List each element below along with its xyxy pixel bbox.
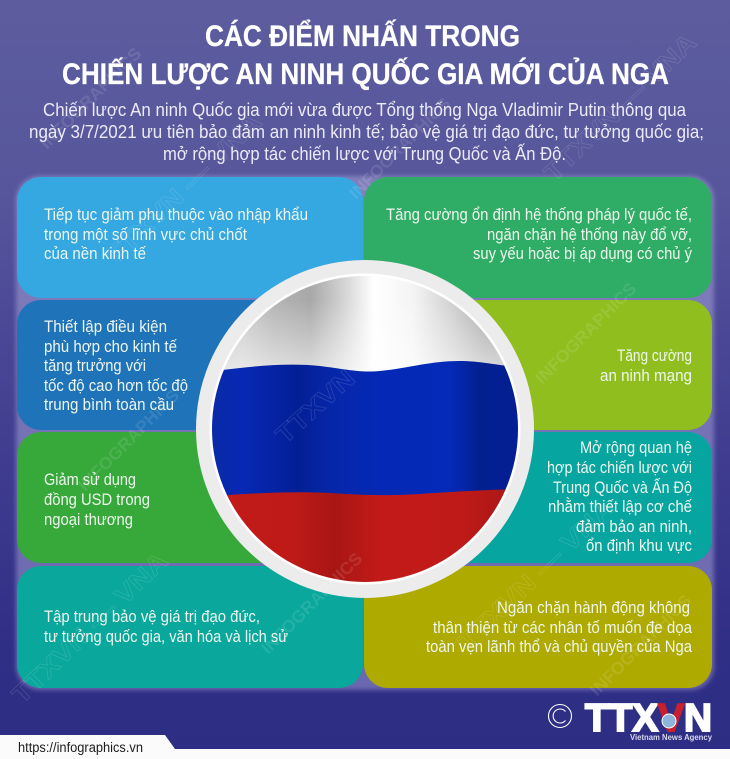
text: cyber security: Tăng cường	[617, 347, 692, 365]
text: strategic cooperation: nhằm thiết lập cơ chế	[548, 497, 692, 516]
title: CÁC ĐIỂM NHẤN TRONG	[205, 19, 520, 53]
text: international law: ngăn chặn hệ thống này đổ vỡ,	[487, 226, 692, 244]
text: import dependence: của nền kinh tế	[44, 245, 146, 263]
text: moral values: Tập trung bảo vệ giá trị đạo đức,	[44, 608, 260, 626]
text: economic growth: tăng trưởng với	[44, 357, 146, 375]
text: strategic cooperation: hợp tác chiến lược với	[547, 459, 692, 477]
text: economic growth: tốc độ cao hơn tốc độ	[44, 377, 188, 395]
watermarks: TTXVN — VNA	[270, 292, 441, 449]
panel: cyber security	[364, 300, 712, 430]
panel glow	[16, 176, 714, 690]
source URL: https://infographics.vn	[18, 740, 143, 755]
intro text: Chiến lược An ninh Quốc gia mới vừa được Tổng thống Nga Vladimir Putin thông qua	[43, 99, 687, 120]
watermarks: TTXVN — VNA	[101, 108, 268, 270]
text: territorial integrity: Ngăn chặn hành động không	[497, 599, 690, 617]
intro text: mở rộng hợp tác chiến lược với Trung Quốc và Ấn Độ.	[163, 143, 566, 164]
text: strategic cooperation: ổn định khu vực	[586, 537, 692, 555]
text: economic growth: trung bình toàn cầu	[44, 396, 174, 414]
text: import dependence: Tiếp tục giảm phụ thuộc vào nhập khẩu	[44, 206, 308, 224]
watermarks: INFOGRAPHICS	[531, 279, 640, 388]
watermarks: TTXVN — VNA	[539, 28, 702, 187]
watermarks: INFOGRAPHICS	[74, 386, 183, 495]
text: economic growth: Thiết lập điều kiện	[44, 318, 167, 336]
panel: international law	[364, 177, 712, 298]
text: international law: suy yếu hoặc bị áp dụng có chủ ý	[473, 245, 693, 263]
panel: reduce USD	[17, 432, 363, 563]
watermarks: INFOGRAPHICS	[586, 591, 695, 700]
text: territorial integrity: toàn vẹn lãnh thổ và chủ quyền của Nga	[426, 638, 693, 656]
icon: copyright	[548, 704, 572, 728]
text: import dependence: trong một số lĩnh vực chủ chốt	[44, 226, 247, 244]
panel: strategic cooperation	[364, 432, 712, 563]
watermarks: INFOGRAPHICS	[257, 549, 366, 658]
watermarks: TTXVN — VNA	[453, 494, 620, 656]
text: cyber security: an ninh mạng	[600, 367, 692, 385]
logo: TTXVN: Vietnam News Agency	[630, 732, 712, 742]
text: strategic cooperation: đảm bảo an ninh,	[576, 518, 692, 536]
text: moral values: tư tưởng quốc gia, văn hóa và lịch sử	[44, 628, 288, 646]
text: territorial integrity: thân thiện từ các nhân tố muốn đe dọa	[433, 619, 693, 637]
footer strip with URL	[0, 735, 730, 759]
icon: Russian flag medallion	[196, 260, 534, 598]
text: strategic cooperation: Trung Quốc và Ấn Độ	[553, 478, 692, 497]
text: reduce USD: ngoại thương	[44, 511, 133, 529]
watermarks: INFOGRAPHICS	[345, 94, 454, 203]
title	[62, 19, 669, 91]
text: reduce USD: Giảm sử dụng	[44, 471, 136, 489]
panel: economic growth	[17, 300, 363, 430]
text: reduce USD: đồng USD trong	[44, 491, 150, 509]
panel: moral values	[17, 566, 363, 688]
watermarks: INFOGRAPHICS	[36, 44, 145, 153]
text: international law: Tăng cường ổn định hệ thống pháp lý quốc tế,	[386, 206, 692, 224]
text: strategic cooperation: Mở rộng quan hệ	[580, 439, 692, 457]
panel: territorial integrity	[364, 566, 712, 688]
watermarks: TTXVN — VNA	[7, 547, 174, 709]
text: economic growth: phù hợp cho kinh tế	[44, 338, 177, 356]
logo: TTXVN: TTXVN	[585, 697, 712, 740]
panel: import dependence	[17, 177, 363, 298]
